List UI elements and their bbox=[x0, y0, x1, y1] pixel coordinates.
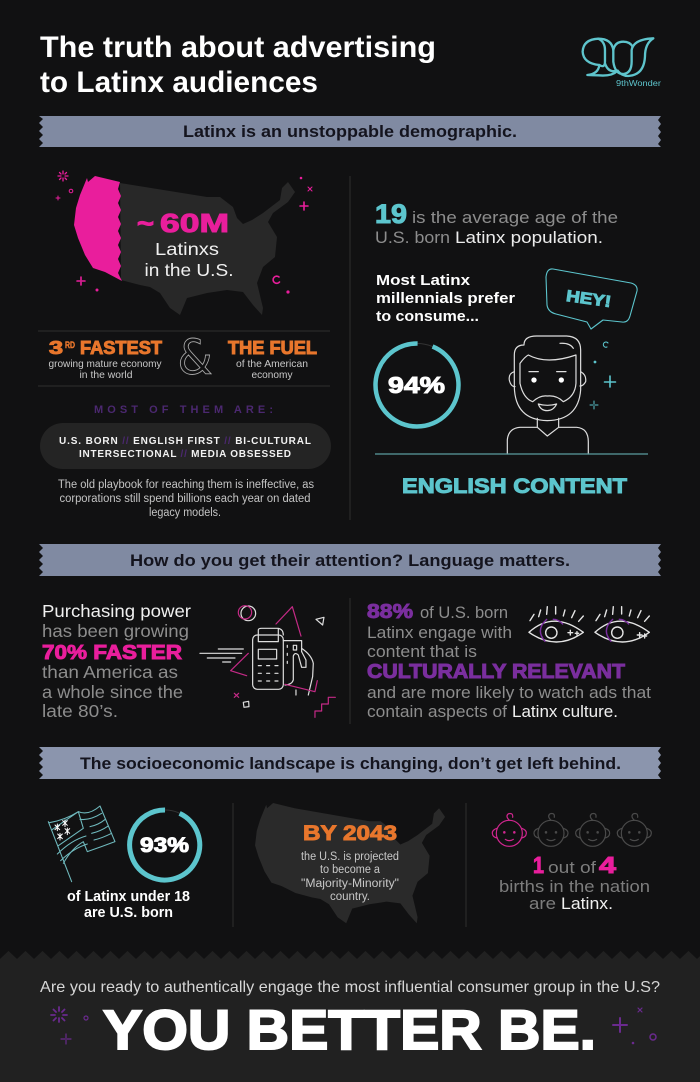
stat: 88% culturally relevant: CULTURALLY RELEVANT bbox=[367, 661, 625, 683]
stat: the fuel bbox=[228, 338, 317, 381]
text: of Latinx under 18: are U.S. born bbox=[84, 905, 173, 921]
text: most Latinx millennials: millennials prefer bbox=[376, 290, 515, 307]
stat: 88% culturally relevant bbox=[367, 601, 651, 721]
stat: purchasing power: 70% FASTER bbox=[42, 642, 183, 664]
stat: purchasing power: has been growing bbox=[42, 621, 189, 641]
footer headline: YOU BETTER BE. bbox=[103, 998, 596, 1061]
banner: socioeconomic landscape bbox=[39, 747, 661, 779]
stat: ~60M Latinxs in the U.S. bbox=[137, 208, 234, 280]
icon: American flag bbox=[48, 806, 115, 882]
stat: 3rd fastest: FASTEST bbox=[80, 338, 162, 358]
text: of Latinx under 18: of Latinx under 18 bbox=[67, 889, 190, 905]
banner: Latinx is an unstoppable demographic: Latinx is an unstoppable demographic. bbox=[183, 123, 517, 141]
heading: most of them are: MOST OF THEM ARE: bbox=[94, 404, 273, 416]
stat: 19 average age: 19 bbox=[375, 199, 407, 229]
title bbox=[40, 31, 436, 99]
icon: bearded man bbox=[507, 336, 588, 454]
stat: 1 out of 4 births: Latinx. bbox=[561, 894, 613, 913]
stat: purchasing power: late 80’s. bbox=[42, 701, 118, 721]
stat: 3rd fastest: in the world bbox=[80, 369, 133, 381]
map: U.S. with west in pink bbox=[74, 176, 295, 315]
stat: 88% culturally relevant: content that is bbox=[367, 643, 477, 661]
text: most Latinx millennials: to consume... bbox=[376, 308, 479, 325]
title: The truth about advertising bbox=[40, 31, 436, 64]
stat: 1 out of 4 births: births in the nation bbox=[499, 877, 650, 896]
ring chart: 94% bbox=[363, 331, 471, 439]
stat: 88% culturally relevant: of U.S. born bbox=[420, 604, 508, 622]
banner: socioeconomic landscape: The socioeconomic landscape is changing, don’t get left behind. bbox=[80, 754, 621, 773]
stat: the fuel: economy bbox=[252, 369, 293, 381]
stat: purchasing power bbox=[42, 601, 191, 721]
stat: ~60M Latinxs in the U.S.: in the U.S. bbox=[144, 260, 234, 280]
text: old playbook: The old playbook for reaching them is ineffective, as bbox=[58, 479, 314, 491]
stat: by 2043: "Majority-Minority" bbox=[301, 878, 399, 890]
pill: traits: U.S. BORN // ENGLISH FIRST // BI-CULTURAL bbox=[59, 436, 311, 447]
heading: English content: ENGLISH CONTENT bbox=[402, 475, 627, 498]
stat: 1 out of 4 births bbox=[499, 852, 650, 913]
stat: 88% culturally relevant: contain aspects of bbox=[367, 703, 507, 721]
stat: 3rd fastest bbox=[48, 338, 162, 381]
stat: 3rd fastest: growing mature economy bbox=[48, 358, 162, 370]
dividers bbox=[38, 331, 330, 386]
title: to Latinx audiences bbox=[40, 66, 318, 99]
text: old playbook: corporations still spend billions each year on dated bbox=[60, 493, 310, 505]
stat: 88% culturally relevant: Latinx culture. bbox=[512, 703, 618, 721]
stat: 88% culturally relevant: and are more likely to watch ads that bbox=[367, 684, 651, 702]
stat: 3rd fastest: RD bbox=[65, 340, 75, 350]
decorative marks around man bbox=[590, 342, 616, 409]
speech bubble: HEY! bbox=[546, 269, 637, 329]
text: most Latinx millennials bbox=[376, 272, 515, 325]
stat: 1 out of 4 births: 1 bbox=[533, 852, 544, 878]
map: U.S. silhouette bbox=[255, 803, 445, 923]
stat: 1 out of 4 births: out of bbox=[548, 858, 596, 877]
baseline rule under man bbox=[375, 453, 648, 455]
text: of Latinx under 18 bbox=[67, 889, 190, 921]
stat: by 2043: country. bbox=[330, 891, 370, 903]
pill: traits: INTERSECTIONAL // MEDIA OBSESSED bbox=[79, 449, 291, 460]
icon: four babies bbox=[492, 813, 651, 846]
stat: 88% culturally relevant: 88% bbox=[367, 601, 413, 623]
decorative marks around map bbox=[56, 171, 312, 293]
banner: Latinx is an unstoppable demographic bbox=[39, 116, 661, 147]
stat: purchasing power: than America as bbox=[42, 662, 178, 682]
stat: by 2043: BY 2043 bbox=[303, 821, 397, 845]
ring chart: 93%: 93% bbox=[140, 834, 189, 857]
stat: by 2043 bbox=[301, 821, 399, 903]
icon: card payment terminal bbox=[200, 606, 335, 717]
stat: the fuel: of the American bbox=[236, 358, 308, 370]
stat: 1 out of 4 births: are bbox=[529, 894, 556, 913]
stat: 19 average age: Latinx population. bbox=[455, 228, 603, 247]
decorative marks in footer bbox=[51, 1007, 656, 1044]
ring chart: 93% bbox=[118, 798, 211, 892]
stat: purchasing power: a whole since the bbox=[42, 682, 183, 702]
banner: language matters: How do you get their attention? Language matters. bbox=[130, 551, 570, 570]
icon: eyes bbox=[529, 607, 649, 642]
stat: ~60M Latinxs in the U.S.: 60M bbox=[160, 208, 229, 238]
stat: by 2043: to become a bbox=[320, 864, 381, 876]
text: old playbook: legacy models. bbox=[149, 507, 221, 519]
pill: traits bbox=[40, 423, 331, 469]
logo: 9thWonder bbox=[583, 38, 661, 88]
logo: 9thWonder: 9thWonder bbox=[616, 78, 661, 88]
text: most Latinx millennials: Most Latinx bbox=[376, 272, 471, 289]
stat: by 2043: the U.S. is projected bbox=[301, 851, 399, 863]
stat: ~60M Latinxs in the U.S.: Latinxs bbox=[155, 239, 219, 259]
stat: 19 average age: is the average age of the bbox=[412, 208, 618, 227]
stat: 19 average age: U.S. born bbox=[375, 228, 450, 247]
banner: language matters bbox=[39, 544, 661, 576]
footer panel bbox=[0, 951, 700, 1082]
icon: ampersand: & bbox=[178, 330, 212, 386]
stat: 19 average age bbox=[375, 199, 618, 247]
stat: the fuel: THE FUEL bbox=[228, 338, 317, 358]
stat: 88% culturally relevant: Latinx engage with bbox=[367, 624, 512, 642]
stat: 1 out of 4 births: 4 bbox=[599, 852, 616, 878]
ring chart: 94%: 94% bbox=[388, 372, 445, 398]
speech bubble: HEY!: HEY! bbox=[565, 288, 612, 311]
stat: 3rd fastest: 3 bbox=[49, 338, 63, 358]
stat: ~60M Latinxs in the U.S.: ~ bbox=[137, 208, 154, 238]
footer question: Are you ready to authentically engage the most influential consumer group in the U.S? bbox=[40, 979, 660, 996]
text: old playbook bbox=[58, 479, 314, 519]
stat: purchasing power: Purchasing power bbox=[42, 601, 191, 621]
